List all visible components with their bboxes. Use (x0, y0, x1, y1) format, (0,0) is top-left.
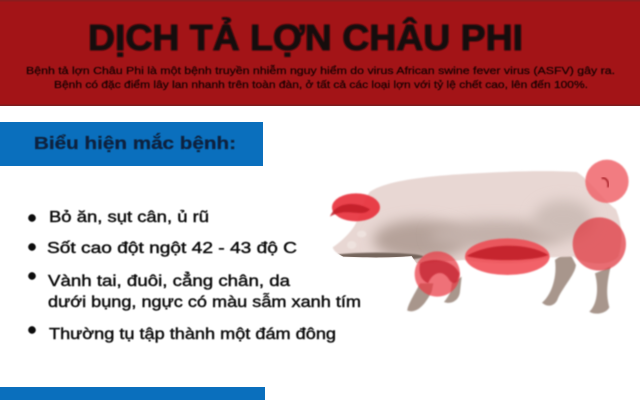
highlight: belly (465, 238, 550, 275)
symptom 2: Sốt cao đột ngột 42 - 43 độ C (47, 240, 297, 257)
title: DỊCH TẢ LỢN CHÂU PHI (88, 16, 523, 58)
pig legs (407, 250, 611, 314)
intro text (26, 64, 615, 91)
pig illustration (330, 160, 629, 314)
highlight: tail (585, 160, 629, 203)
intro text: Bệnh tả lợn Châu Phi là một bệnh truyền nhiễm nguy hiểm do virus African swine fever virus (ASFV) gây ra. (26, 64, 615, 77)
bottom section bar (0, 387, 265, 400)
header banner (0, 0, 640, 106)
pig body (333, 171, 622, 264)
highlight: front leg (415, 251, 460, 297)
section heading: signs of disease (0, 122, 263, 166)
body shading (330, 200, 593, 261)
highlight: hind leg (573, 217, 626, 271)
symptom 1: Bỏ ăn, sụt cân, ủ rũ (49, 209, 209, 226)
symptoms list (28, 209, 361, 343)
symptom 3 (28, 272, 361, 311)
section heading: signs of disease: Biểu hiện mắc bệnh: (34, 132, 236, 153)
symptom 4: Thường tụ tập thành một đám đông (49, 326, 336, 343)
highlight: ear (330, 193, 380, 221)
intro text: Bệnh có đặc điểm lây lan nhanh trên toàn đàn, ở tất cả các loại lợn với tỷ lệ chết cao, lên đến 100%. (54, 79, 588, 91)
symptom 3: Vành tai, đuôi, cẳng chân, da (48, 272, 290, 290)
symptom 3: dưới bụng, ngực có màu sẫm xanh tím (48, 294, 361, 311)
snout highlights (347, 231, 366, 249)
